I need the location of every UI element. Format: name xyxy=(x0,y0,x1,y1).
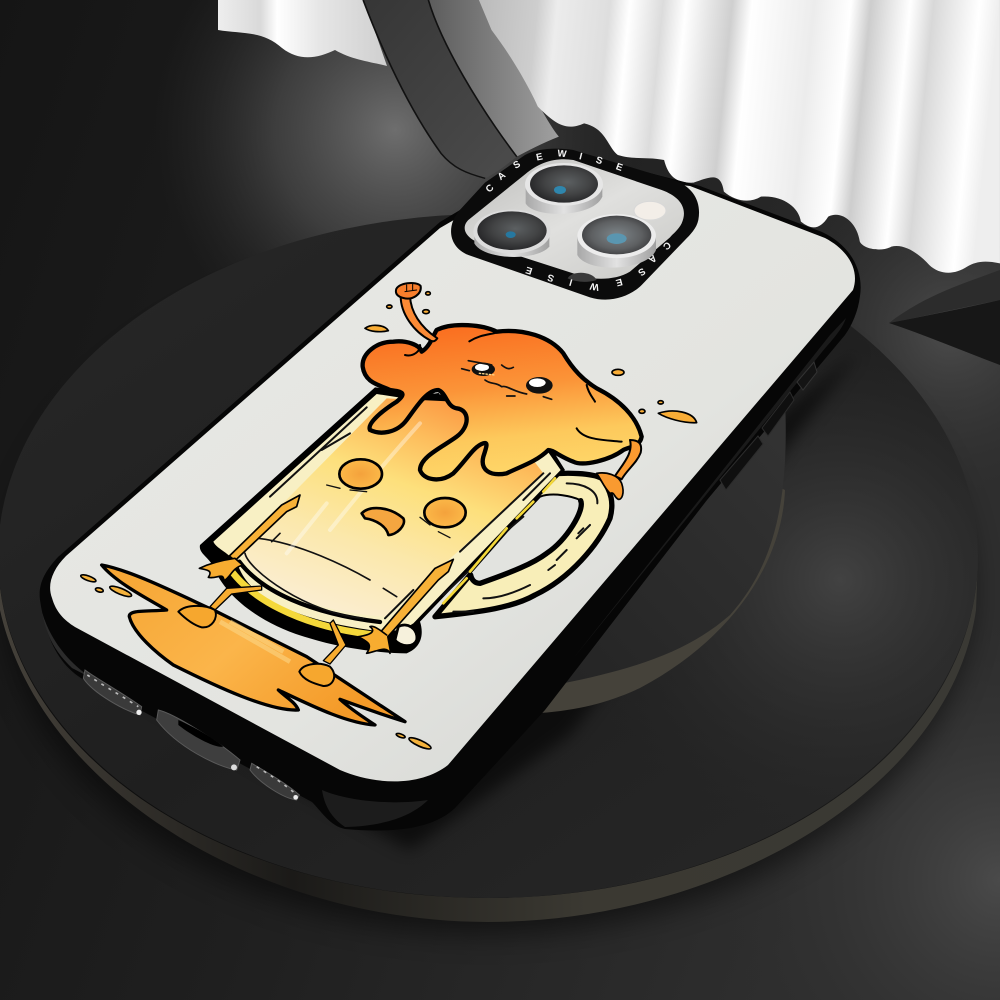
knuckle white xyxy=(395,625,417,646)
mug handle xyxy=(435,473,612,617)
hand on handle xyxy=(597,473,623,499)
lens left xyxy=(473,210,551,257)
hand right xyxy=(358,626,390,653)
flash xyxy=(634,201,666,220)
brand text top: S xyxy=(512,159,523,172)
glass highlights xyxy=(287,423,420,553)
phone back panel xyxy=(50,170,855,781)
mug mouth xyxy=(362,508,404,535)
brand text top: E xyxy=(535,151,544,164)
mug glass xyxy=(213,394,561,631)
brand text bottom xyxy=(524,239,673,292)
foam mouth xyxy=(485,380,552,399)
small round disc xyxy=(420,300,786,713)
brand text bottom: A xyxy=(646,252,658,265)
base yellow band xyxy=(227,565,370,634)
brand text bottom: S xyxy=(546,271,556,284)
puddle sheen xyxy=(220,622,290,662)
brand text top: E xyxy=(614,161,625,174)
brand text bottom: I xyxy=(568,276,574,287)
brand text bottom: E xyxy=(524,264,534,276)
bottom speaker and port xyxy=(83,670,299,800)
base inner curve xyxy=(245,533,397,618)
lens top xyxy=(525,163,603,214)
leg left xyxy=(210,586,262,610)
raised arm xyxy=(401,296,437,341)
leg right xyxy=(323,620,346,664)
right stand xyxy=(889,270,1000,365)
hand left xyxy=(199,558,243,581)
mug silhouette xyxy=(200,387,565,653)
eye right xyxy=(526,377,553,394)
brand text bottom: W xyxy=(588,280,600,292)
beer puddle xyxy=(80,565,432,751)
phone case body xyxy=(40,150,861,831)
big round disc xyxy=(0,214,1000,934)
mug eye left xyxy=(327,459,382,492)
arc lines xyxy=(363,0,517,178)
brand text top: W xyxy=(557,148,568,160)
lens right xyxy=(577,214,656,268)
glass side lines xyxy=(270,407,550,618)
phone shadow on disc xyxy=(60,350,860,850)
puddle drops xyxy=(80,573,432,751)
mug eye right xyxy=(420,498,466,538)
arc band front xyxy=(363,0,517,178)
camera module xyxy=(451,148,699,300)
beer mug character xyxy=(199,283,697,664)
brand text top: S xyxy=(594,155,604,167)
arm left xyxy=(229,495,300,561)
curtain right xyxy=(479,0,1000,273)
brand text bottom: E xyxy=(614,276,624,288)
camera window xyxy=(465,159,684,279)
brand text top: I xyxy=(578,151,584,163)
curtain left xyxy=(218,0,387,66)
microphone xyxy=(568,273,597,282)
left foot xyxy=(178,606,216,627)
glass yellow line xyxy=(443,478,555,603)
brand text top: C xyxy=(484,182,496,195)
fist xyxy=(396,283,421,299)
foam detail lines xyxy=(405,333,622,442)
brand text top: A xyxy=(496,170,508,183)
camera ring xyxy=(451,149,699,300)
brand text top xyxy=(484,148,625,195)
right foot xyxy=(299,664,334,686)
beer fill xyxy=(243,398,543,617)
arc band back xyxy=(428,0,559,157)
beer foam xyxy=(363,325,642,479)
brand text bottom: S xyxy=(635,265,647,278)
arm grabbing handle xyxy=(615,440,641,479)
base dark line xyxy=(239,562,380,622)
puddle shape xyxy=(102,565,405,725)
splash drops xyxy=(365,292,697,423)
curtain and arcs backdrop xyxy=(363,0,1000,273)
brand text bottom: C xyxy=(660,239,673,252)
arm right xyxy=(380,559,453,638)
eye left xyxy=(462,361,513,376)
side buttons xyxy=(720,362,817,490)
